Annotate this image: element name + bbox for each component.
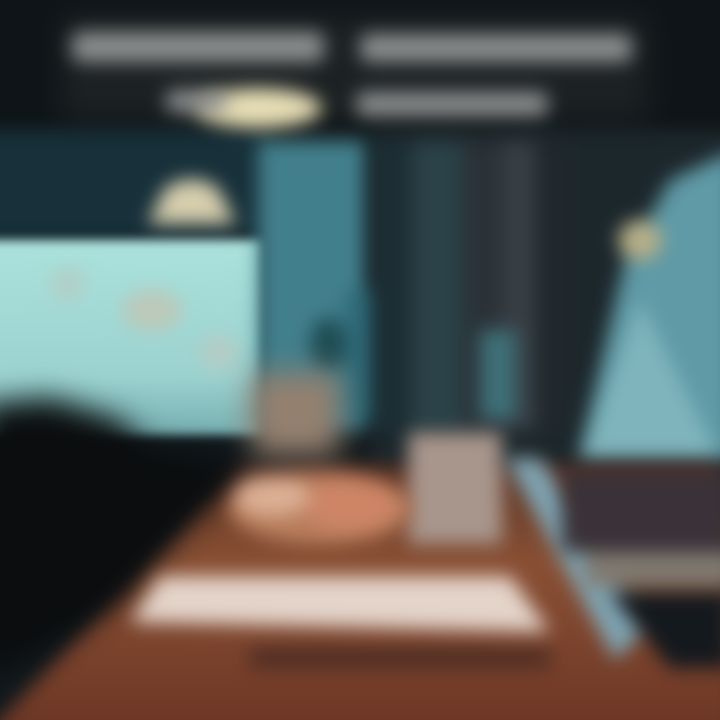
icon: hanging lamp 1 xyxy=(194,88,322,128)
food on plate xyxy=(228,472,412,544)
panel: teal column xyxy=(258,140,380,430)
lamp base xyxy=(250,372,340,456)
white plate xyxy=(130,576,550,668)
panel: right triangle wall xyxy=(578,150,720,460)
light blue stripe xyxy=(505,458,650,660)
panel: curtains xyxy=(372,140,572,430)
back wall xyxy=(0,0,720,470)
icon: small wall light xyxy=(618,220,662,260)
table xyxy=(0,465,720,720)
dark foreground shape xyxy=(0,398,250,680)
laptop xyxy=(562,470,720,668)
title xyxy=(72,32,632,116)
panel: mint wall xyxy=(0,240,260,435)
icon: hanging lamp 2 xyxy=(148,179,236,224)
white panel xyxy=(408,432,502,544)
title band xyxy=(60,15,650,120)
